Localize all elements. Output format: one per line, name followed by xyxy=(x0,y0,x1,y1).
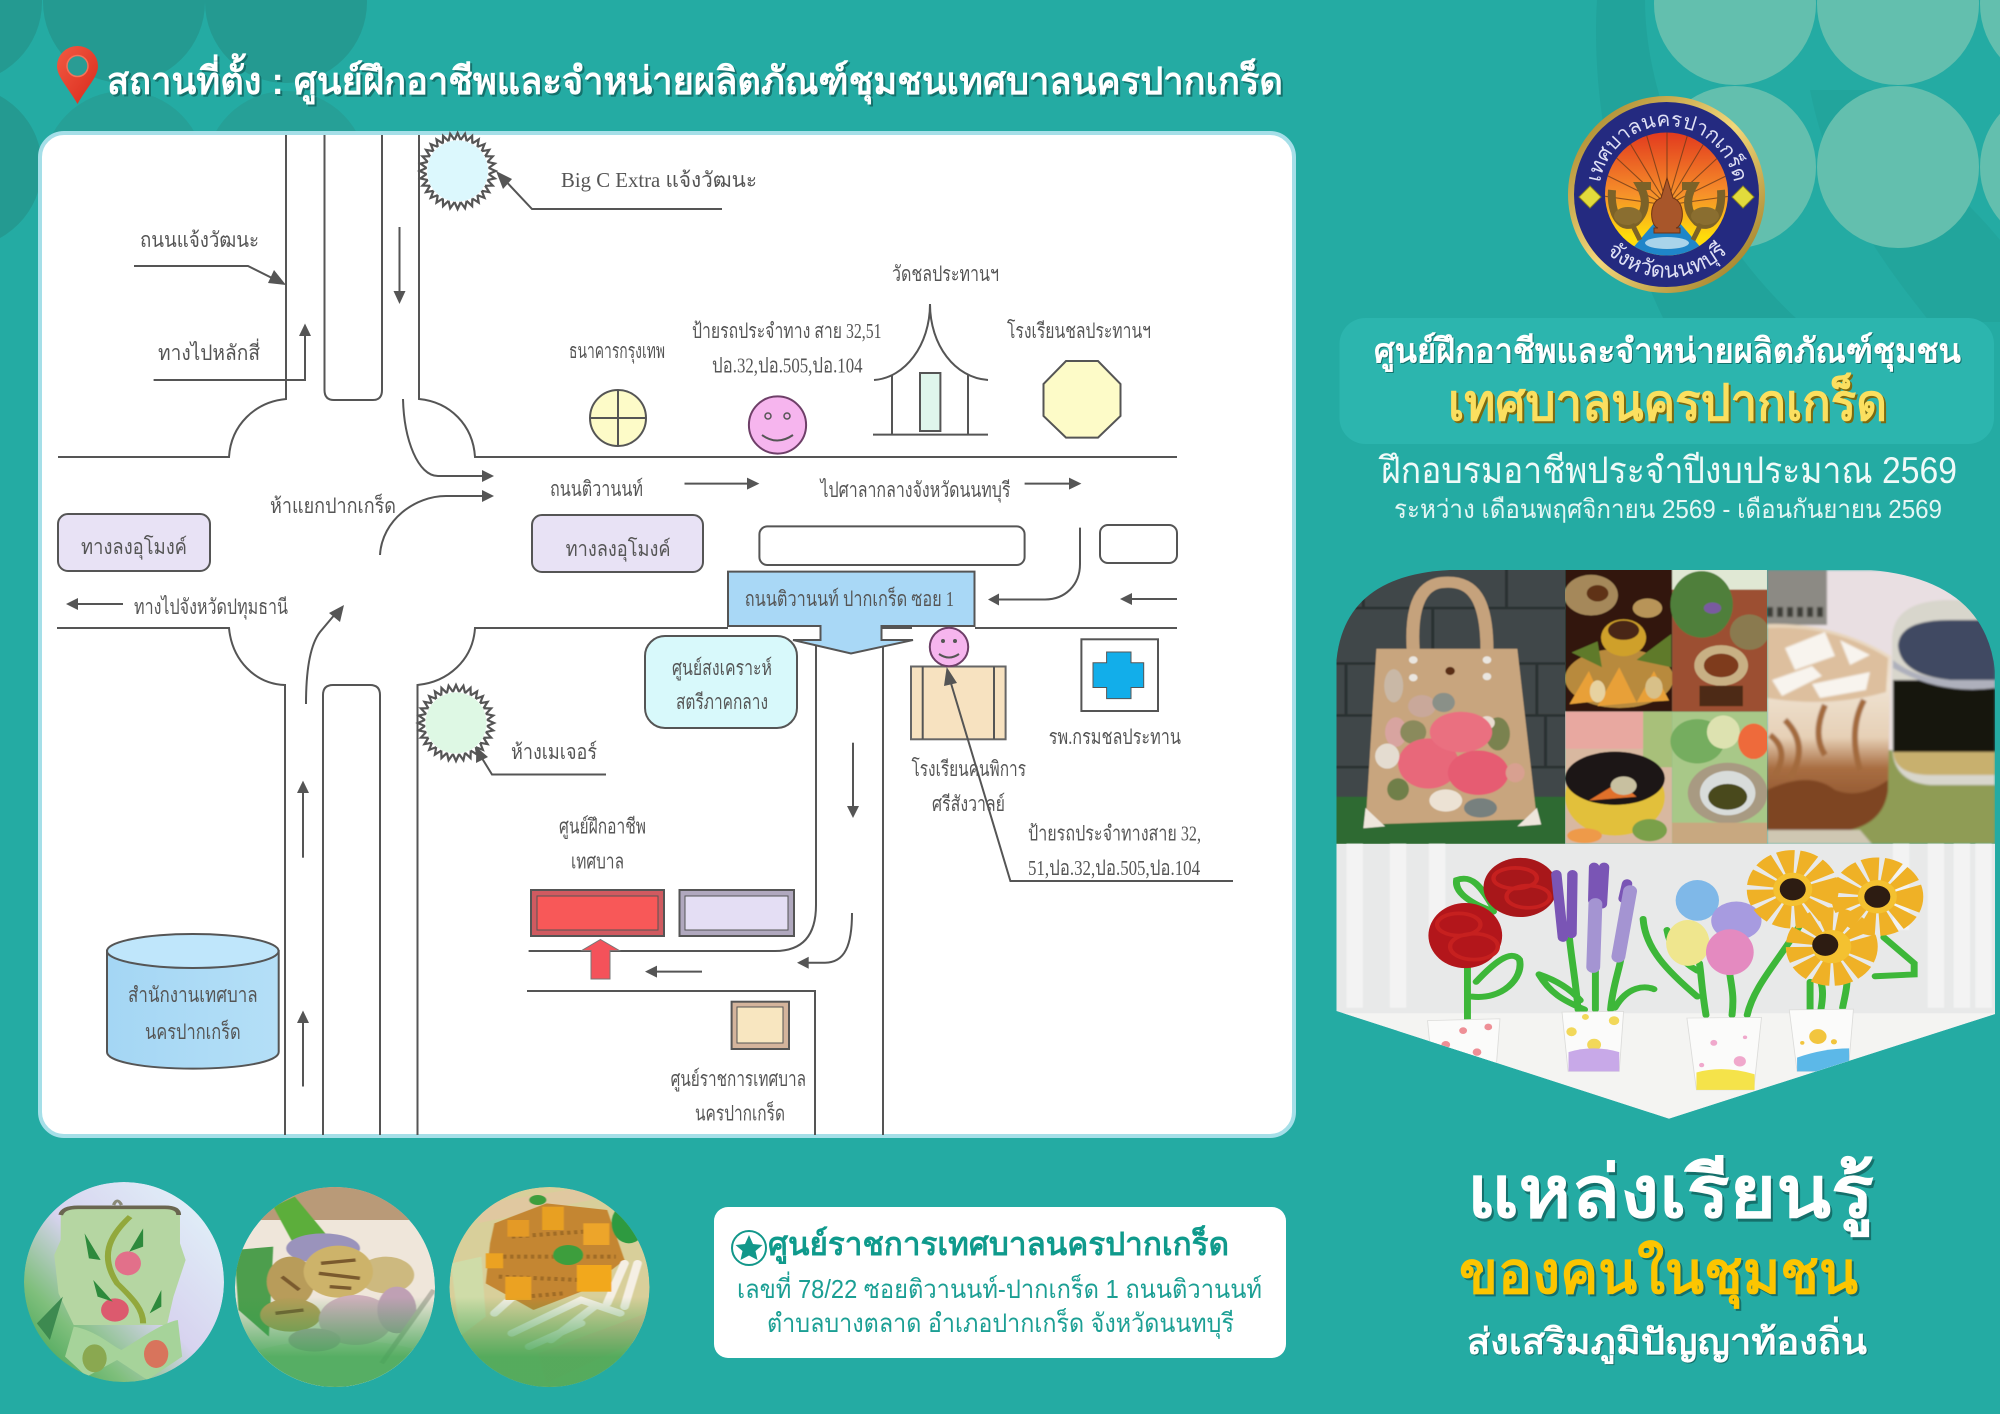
dark coffee cup xyxy=(1892,600,1995,785)
icon: location pin xyxy=(57,46,98,104)
icon: star badge xyxy=(732,1231,766,1265)
logo: municipal seal: จังหวัดนนทบุรี xyxy=(1610,240,1726,278)
disabled school and bus stop: ศรีสังวาลย์ xyxy=(932,792,1005,816)
decorative light circles top right xyxy=(1654,0,2000,248)
training centre buildings: เทศบาล xyxy=(571,850,624,874)
soi callout sign: ถนนติวานนท์ ปากเกร็ด ซอย 1 xyxy=(745,585,954,611)
disabled school and bus stop xyxy=(911,628,1233,881)
programme year text: ระหว่าง เดือนพฤศจิกายน 2569 - เดือนกันยายน 2569 xyxy=(1394,494,1942,524)
bus stop smiley: ป้ายรถประจำทาง สาย 32,51 xyxy=(692,319,882,343)
training centre buildings: ศูนย์ฝึกอาชีพ xyxy=(559,815,646,840)
intersection arrows and labels: ห้าแยกปากเกร็ด xyxy=(270,492,396,518)
roads xyxy=(57,135,1177,1135)
slogan: learning resource xyxy=(1459,1153,1874,1365)
training centre buildings xyxy=(531,815,794,979)
photo: iced coffee xyxy=(1767,570,1995,844)
municipal office cylinder: สำนักงานเทศบาล xyxy=(128,983,258,1007)
photo: noodle salad circle xyxy=(450,1187,650,1387)
road islands xyxy=(759,525,1177,606)
panel: address card: ศูนย์ราชการเทศบาลนครปากเกร็ด xyxy=(768,1224,1229,1265)
programme year text xyxy=(1378,450,1957,524)
bank marker xyxy=(569,339,665,446)
bus stop smiley xyxy=(692,319,882,454)
panel: address card: เลขที่ 78/22 ซอยติวานนท์-ปากเกร็ด 1 ถนนติวานนท์ xyxy=(737,1271,1262,1304)
government centre building: นครปากเกร็ด xyxy=(695,1100,785,1126)
school octagon: โรงเรียนชลประทานฯ xyxy=(1007,319,1151,343)
south road arrows xyxy=(297,743,859,1086)
tunnel signs: ทางลงอุโมงค์ xyxy=(81,535,187,560)
map labels and arrows north road xyxy=(134,88,757,380)
photo: woven bag xyxy=(1333,567,1567,845)
government centre building: ศูนย์ราชการเทศบาล xyxy=(671,1067,806,1092)
temple: วัดชลประทานฯ xyxy=(892,262,999,286)
Major marker: ห้างเมเจอร์ xyxy=(511,740,597,764)
photo: grilled dumplings circle xyxy=(234,1183,438,1387)
slogan: learning resource: ส่งเสริมภูมิปัญญาท้องถิ่น xyxy=(1467,1316,1867,1365)
hospital: รพ.กรมชลประทาน xyxy=(1049,725,1181,749)
temple xyxy=(873,262,999,435)
women welfare centre: ศูนย์สงเคราะห์ xyxy=(672,656,772,681)
slogan: learning resource: ของคนในชุมชน xyxy=(1459,1239,1858,1310)
soi callout sign xyxy=(728,572,974,654)
panel: product photo collage xyxy=(1333,567,1997,1122)
iced milk glass xyxy=(1767,624,1891,844)
municipal office cylinder xyxy=(107,934,279,1069)
Major marker xyxy=(373,640,606,806)
photo: pipe cleaner flowers xyxy=(1333,844,1997,1122)
photo: embroidered purse circle xyxy=(24,1182,224,1382)
panel: address card: ตำบลบางตลาด อำเภอปากเกร็ด จังหวัดนนทบุรี xyxy=(767,1307,1234,1339)
women welfare centre: สตรีภาคกลาง xyxy=(676,690,768,714)
disabled school and bus stop: 51,ปอ.32,ปอ.505,ปอ.104 xyxy=(1028,856,1200,880)
panel: programme title box xyxy=(1340,318,1994,444)
intersection arrows and labels: ทางไปจังหวัดปทุมธานี xyxy=(134,595,288,620)
municipal office cylinder: นครปากเกร็ด xyxy=(145,1018,241,1044)
title: สถานที่ตั้ง : ศูนย์ฝึกอาชีพและจำหน่ายผลิตภัณฑ์ชุมชนเทศบาลนครปากเกร็ด xyxy=(107,53,1283,105)
panel: address card xyxy=(714,1207,1286,1358)
women welfare centre xyxy=(645,636,797,728)
disabled school and bus stop: ป้ายรถประจำทางสาย 32, xyxy=(1028,822,1201,846)
disabled school and bus stop: โรงเรียนคนพิการ xyxy=(912,757,1026,781)
Big C marker xyxy=(375,88,540,254)
decorative dark circles top left xyxy=(0,0,367,253)
intersection arrows and labels: ถนนติวานนท์ xyxy=(550,477,643,501)
map labels and arrows north road: ทางไปหลักสี่ xyxy=(158,338,260,365)
panel: location map xyxy=(40,88,1294,1136)
intersection arrows and labels: ไปศาลากลางจังหวัดนนทบุรี xyxy=(819,478,1010,503)
bank marker: ธนาคารกรุงเทพ xyxy=(569,339,665,364)
government centre building xyxy=(671,1002,806,1126)
intersection arrows and labels xyxy=(66,399,1081,704)
photo: Thai food collage xyxy=(1564,567,1769,844)
panel: programme title box: เทศบาลนครปากเกร็ด xyxy=(1448,372,1887,431)
map labels and arrows north road: Big C Extra แจ้งวัฒนะ xyxy=(561,168,757,192)
programme year text: ฝึกอบรมอาชีพประจำปีงบประมาณ 2569 xyxy=(1378,450,1957,491)
logo: municipal seal: เทศบาลนครปากเกร็ด xyxy=(1589,114,1747,181)
map labels and arrows north road: ถนนแจ้งวัฒนะ xyxy=(140,228,259,252)
tunnel signs: ทางลงอุโมงค์ xyxy=(566,537,671,562)
slogan: learning resource: แหล่งเรียนรู้ xyxy=(1467,1153,1874,1238)
logo: municipal seal xyxy=(1568,96,1765,293)
school octagon xyxy=(1007,319,1151,438)
hospital xyxy=(1049,639,1181,749)
panel: programme title box: ศูนย์ฝึกอาชีพและจำหน่ายผลิตภัณฑ์ชุมชน xyxy=(1374,332,1961,372)
tunnel signs xyxy=(58,514,703,572)
bus stop smiley: ปอ.32,ปอ.505,ปอ.104 xyxy=(712,354,863,378)
